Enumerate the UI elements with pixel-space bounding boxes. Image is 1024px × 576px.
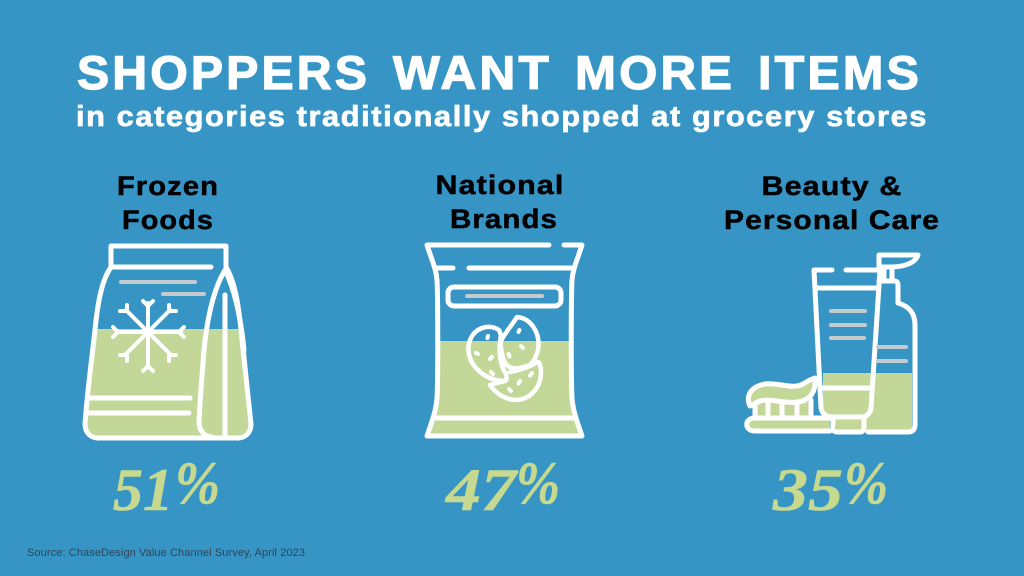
bag green fill (85, 329, 252, 438)
stat: 35%: 35 (772, 457, 843, 523)
heading: national brands: National (436, 170, 564, 200)
title (77, 46, 922, 99)
label line (467, 294, 542, 298)
stat: 47%: % (516, 450, 560, 516)
toothpaste (748, 378, 815, 406)
tube cap (833, 418, 864, 432)
stat: 51%: % (175, 450, 220, 516)
stat: 51%: 51 (113, 457, 173, 523)
bag outline (85, 246, 251, 438)
icon: frozen food bag (85, 246, 252, 438)
icon: snowflake (113, 301, 184, 371)
icon: beauty products (747, 255, 918, 432)
tube (814, 270, 880, 417)
heading: beauty and personal care: Beauty & (762, 171, 902, 201)
heading: frozen foods (117, 171, 219, 235)
stat: 35% (772, 450, 888, 523)
bottle label lines (878, 347, 906, 361)
bag outline (427, 245, 582, 436)
green fills (823, 373, 912, 432)
heading: beauty and personal care: Personal Care (724, 205, 940, 235)
toothbrush (747, 400, 830, 431)
label window (448, 287, 561, 306)
stat: 51% (113, 450, 220, 523)
heading: national brands: Brands (450, 204, 558, 234)
stat: 35%: % (844, 450, 888, 516)
bag green fill (429, 341, 580, 435)
pump bottle (868, 255, 918, 432)
title: ITEMS (758, 46, 922, 99)
subtitle: in categories traditionally shopped at grocery stores (76, 101, 928, 133)
title: WANT (393, 46, 552, 99)
title: SHOPPERS (77, 46, 370, 99)
heading: frozen foods: Foods (122, 205, 214, 235)
title: MORE (575, 46, 735, 99)
icon: national brands snack bag (427, 245, 582, 436)
icon: cookies (468, 317, 541, 400)
stat: 47% (445, 450, 560, 523)
front lines (88, 398, 190, 413)
source note: Source: ChaseDesign Value Channel Survey, April 2023 (27, 547, 305, 559)
label lines (121, 282, 204, 294)
side gusset (199, 270, 244, 437)
heading: frozen foods: Frozen (117, 171, 219, 201)
stat: 47%: 47 (445, 457, 518, 523)
heading: beauty and personal care (724, 171, 940, 235)
heading: national brands (436, 170, 564, 234)
cookie crumbs (476, 330, 532, 391)
tube label lines (831, 311, 865, 338)
